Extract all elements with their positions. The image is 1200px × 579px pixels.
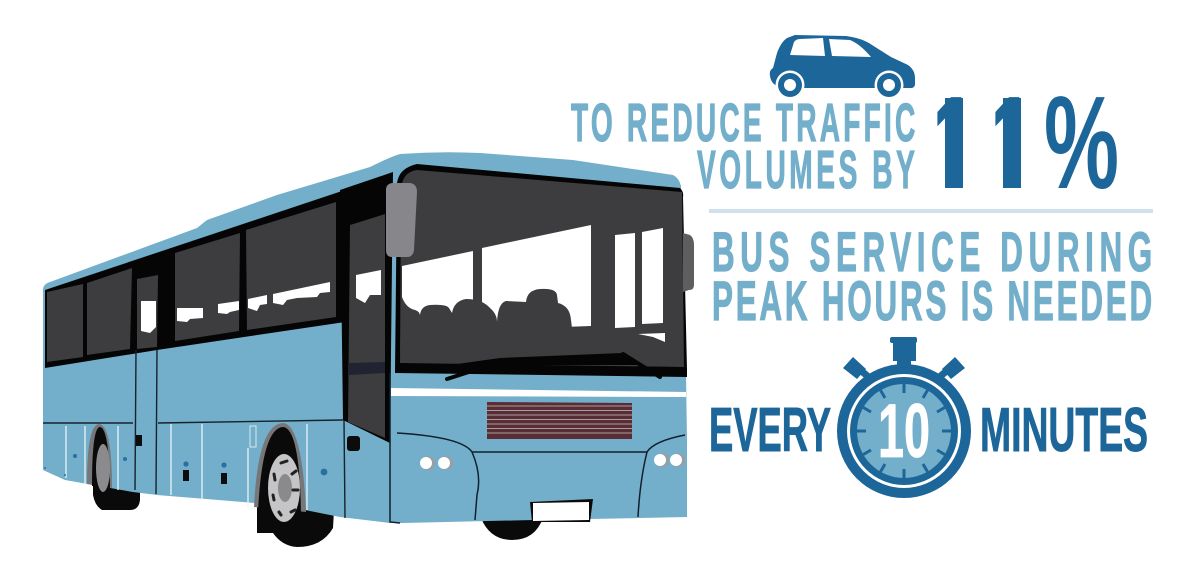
heading: to reduce traffic volumes by: VOLUMES BY bbox=[697, 140, 915, 201]
right mirror bbox=[683, 233, 694, 292]
rear wheel arch bbox=[87, 424, 112, 492]
car windows bbox=[790, 38, 871, 57]
stopwatch rings bbox=[837, 364, 971, 498]
door panel bbox=[340, 172, 393, 443]
front outline lines bbox=[390, 373, 685, 523]
big number: 11%: 1 bbox=[990, 69, 1034, 216]
windshield glass bbox=[400, 170, 684, 367]
door glass bbox=[348, 214, 385, 438]
white stripe bbox=[391, 388, 686, 397]
side windows bbox=[47, 202, 336, 362]
car wheels bbox=[776, 70, 904, 100]
door stripe bbox=[348, 362, 385, 375]
grille bbox=[487, 402, 632, 439]
white lower trim bbox=[66, 424, 307, 510]
rear wheel bbox=[93, 480, 140, 510]
stopwatch number: 10 bbox=[878, 389, 930, 474]
text: bus service during peak hours is needed: PEAK HOURS IS NEEDED bbox=[712, 269, 1152, 332]
front under-wheel bbox=[481, 518, 543, 540]
interior seats bbox=[400, 289, 600, 355]
body panel lines bbox=[43, 350, 345, 518]
big number: 11% bbox=[937, 96, 1117, 189]
icon: car bbox=[770, 35, 915, 100]
stopwatch ticks bbox=[857, 384, 951, 478]
front wheel tyre bbox=[257, 500, 334, 547]
text: every: EVERY bbox=[709, 396, 831, 465]
side details: lights and lockers bbox=[44, 426, 360, 484]
licence plate bbox=[530, 499, 593, 522]
illustration: blue bus bbox=[43, 152, 694, 547]
stopwatch crown and buttons bbox=[843, 337, 965, 380]
side window reflections bbox=[141, 282, 330, 333]
side window band bbox=[45, 190, 345, 368]
front wheel arch and hub bbox=[254, 423, 306, 522]
big number: 11%: % bbox=[1044, 69, 1119, 216]
door reflection bbox=[356, 270, 381, 303]
wipers bbox=[447, 353, 660, 379]
headlights bbox=[420, 453, 685, 470]
big number: 11%: 1 bbox=[932, 69, 976, 216]
windshield frame bbox=[395, 164, 687, 377]
heading: to reduce traffic volumes by bbox=[571, 93, 915, 201]
bus body bbox=[43, 152, 687, 523]
text: bus service during peak hours is needed: BUS SERVICE DURING bbox=[712, 220, 1152, 283]
icon: stopwatch bbox=[837, 337, 971, 498]
windshield windows bbox=[402, 225, 665, 342]
left mirror bbox=[386, 183, 417, 257]
heading: to reduce traffic volumes by: TO REDUCE TRAFFIC bbox=[571, 93, 915, 154]
text: bus service during peak hours is needed bbox=[712, 220, 1152, 332]
